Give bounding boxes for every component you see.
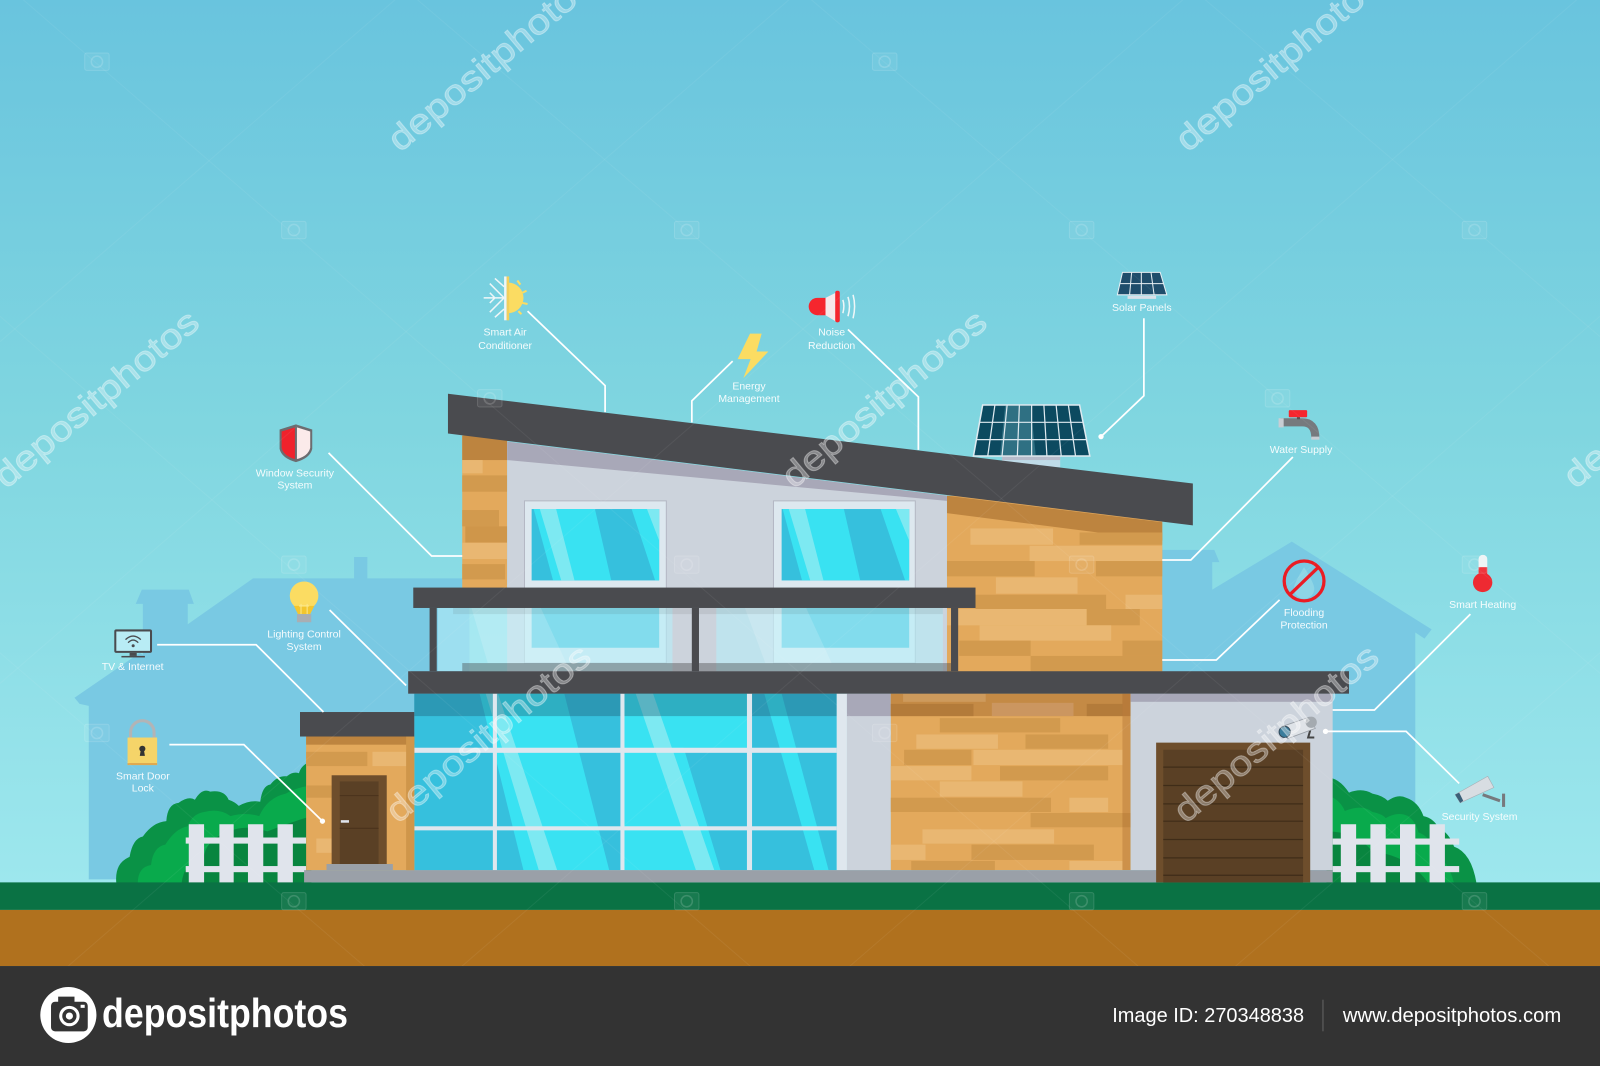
label: lighting control system: System (287, 641, 322, 653)
icon: security camera (1455, 776, 1505, 807)
label: smart heating: Smart Heating (1449, 599, 1516, 611)
label: lighting control system: Lighting Control (267, 629, 341, 641)
right background house silhouette (1153, 542, 1432, 883)
label: noise reduction: Reduction (808, 340, 855, 352)
solar panel on roof (973, 405, 1090, 467)
callout leader lines (157, 311, 1470, 824)
callout: water supply (1270, 410, 1333, 456)
garage door (1156, 743, 1310, 882)
lower slab (408, 671, 1349, 694)
right bush (1327, 777, 1477, 883)
footer logo (40, 987, 348, 1043)
icon: megaphone (809, 291, 855, 322)
balcony glass railing (438, 608, 951, 671)
upper right brick wall (947, 496, 1162, 672)
upper grey wall (507, 442, 947, 673)
callout: noise reduction (808, 291, 855, 352)
label: flooding protection: Flooding (1284, 607, 1324, 619)
icon: thermometer (1473, 555, 1492, 592)
roof (448, 394, 1193, 525)
balcony top slab (413, 588, 976, 608)
footer logo: depositphotos (102, 990, 348, 1036)
label: solar panels: Solar Panels (1112, 302, 1172, 314)
ground floor brick wall (891, 694, 1131, 870)
icon: tv with wifi (115, 630, 151, 657)
callout: lighting control system (267, 581, 341, 653)
label: water supply: Water Supply (1270, 444, 1333, 456)
label: smart door lock: Lock (132, 783, 155, 795)
label: smart door lock: Smart Door (116, 770, 170, 782)
watermark overlay: depositphotos (379, 637, 599, 830)
watermark overlay: depositphotos (775, 303, 994, 496)
garage wall (1131, 694, 1333, 870)
left background house silhouette (74, 557, 469, 879)
balcony posts (430, 608, 958, 671)
upper right window (773, 501, 915, 663)
icon: light bulb (290, 581, 318, 622)
small entrance building (300, 712, 414, 870)
label: smart air conditioner: Smart Air (484, 327, 527, 339)
left bush (116, 761, 311, 883)
callout: security system (1442, 776, 1518, 823)
icon: solar panel (1117, 272, 1167, 299)
callout: smart air conditioner (478, 276, 532, 352)
callout: smart door lock (116, 721, 170, 795)
entrance brick wall (306, 737, 414, 870)
icon: sun and snowflake (484, 276, 528, 320)
icon: padlock (128, 721, 157, 765)
entrance door (327, 775, 393, 870)
label: flooding protection: Protection (1280, 619, 1328, 631)
callout: energy management (718, 334, 780, 405)
label: noise reduction: Noise (818, 327, 845, 339)
ground floor glass wall (414, 694, 847, 870)
label: tv and internet: TV & Internet (102, 661, 164, 673)
entrance roof (300, 712, 414, 737)
icon: lightning bolt (738, 334, 768, 378)
left fence (186, 824, 306, 883)
image id: Image ID: 270348838 (1112, 1005, 1304, 1027)
background houses (74, 542, 1432, 883)
callout: smart heating (1449, 555, 1516, 611)
icon: no water drop (1284, 561, 1324, 601)
upper left brick wall (462, 436, 507, 589)
label: window security system: System (277, 480, 313, 492)
foundation (304, 870, 1333, 882)
website url: www.depositphotos.com (1342, 1005, 1561, 1027)
label: smart air conditioner: Conditioner (478, 340, 532, 352)
ground (0, 882, 1600, 966)
garage security camera (1279, 717, 1317, 739)
label: energy management: Management (718, 393, 780, 405)
main house (300, 394, 1349, 882)
icon: faucet (1279, 410, 1319, 440)
callout: solar panels (1112, 272, 1172, 314)
watermark overlay: depositphotos (1166, 637, 1386, 830)
upper left window (524, 501, 666, 663)
callout: tv and internet (102, 630, 164, 673)
right fence (1333, 824, 1459, 883)
callout: window security system (256, 424, 335, 492)
label: energy management: Energy (732, 381, 766, 393)
ground floor grey wall (847, 694, 891, 870)
label: security system: Security System (1442, 811, 1518, 823)
icon: shield (280, 424, 312, 462)
footer bar (0, 966, 1600, 1066)
callout: flooding protection (1280, 561, 1328, 631)
label: window security system: Window Security (256, 467, 335, 479)
